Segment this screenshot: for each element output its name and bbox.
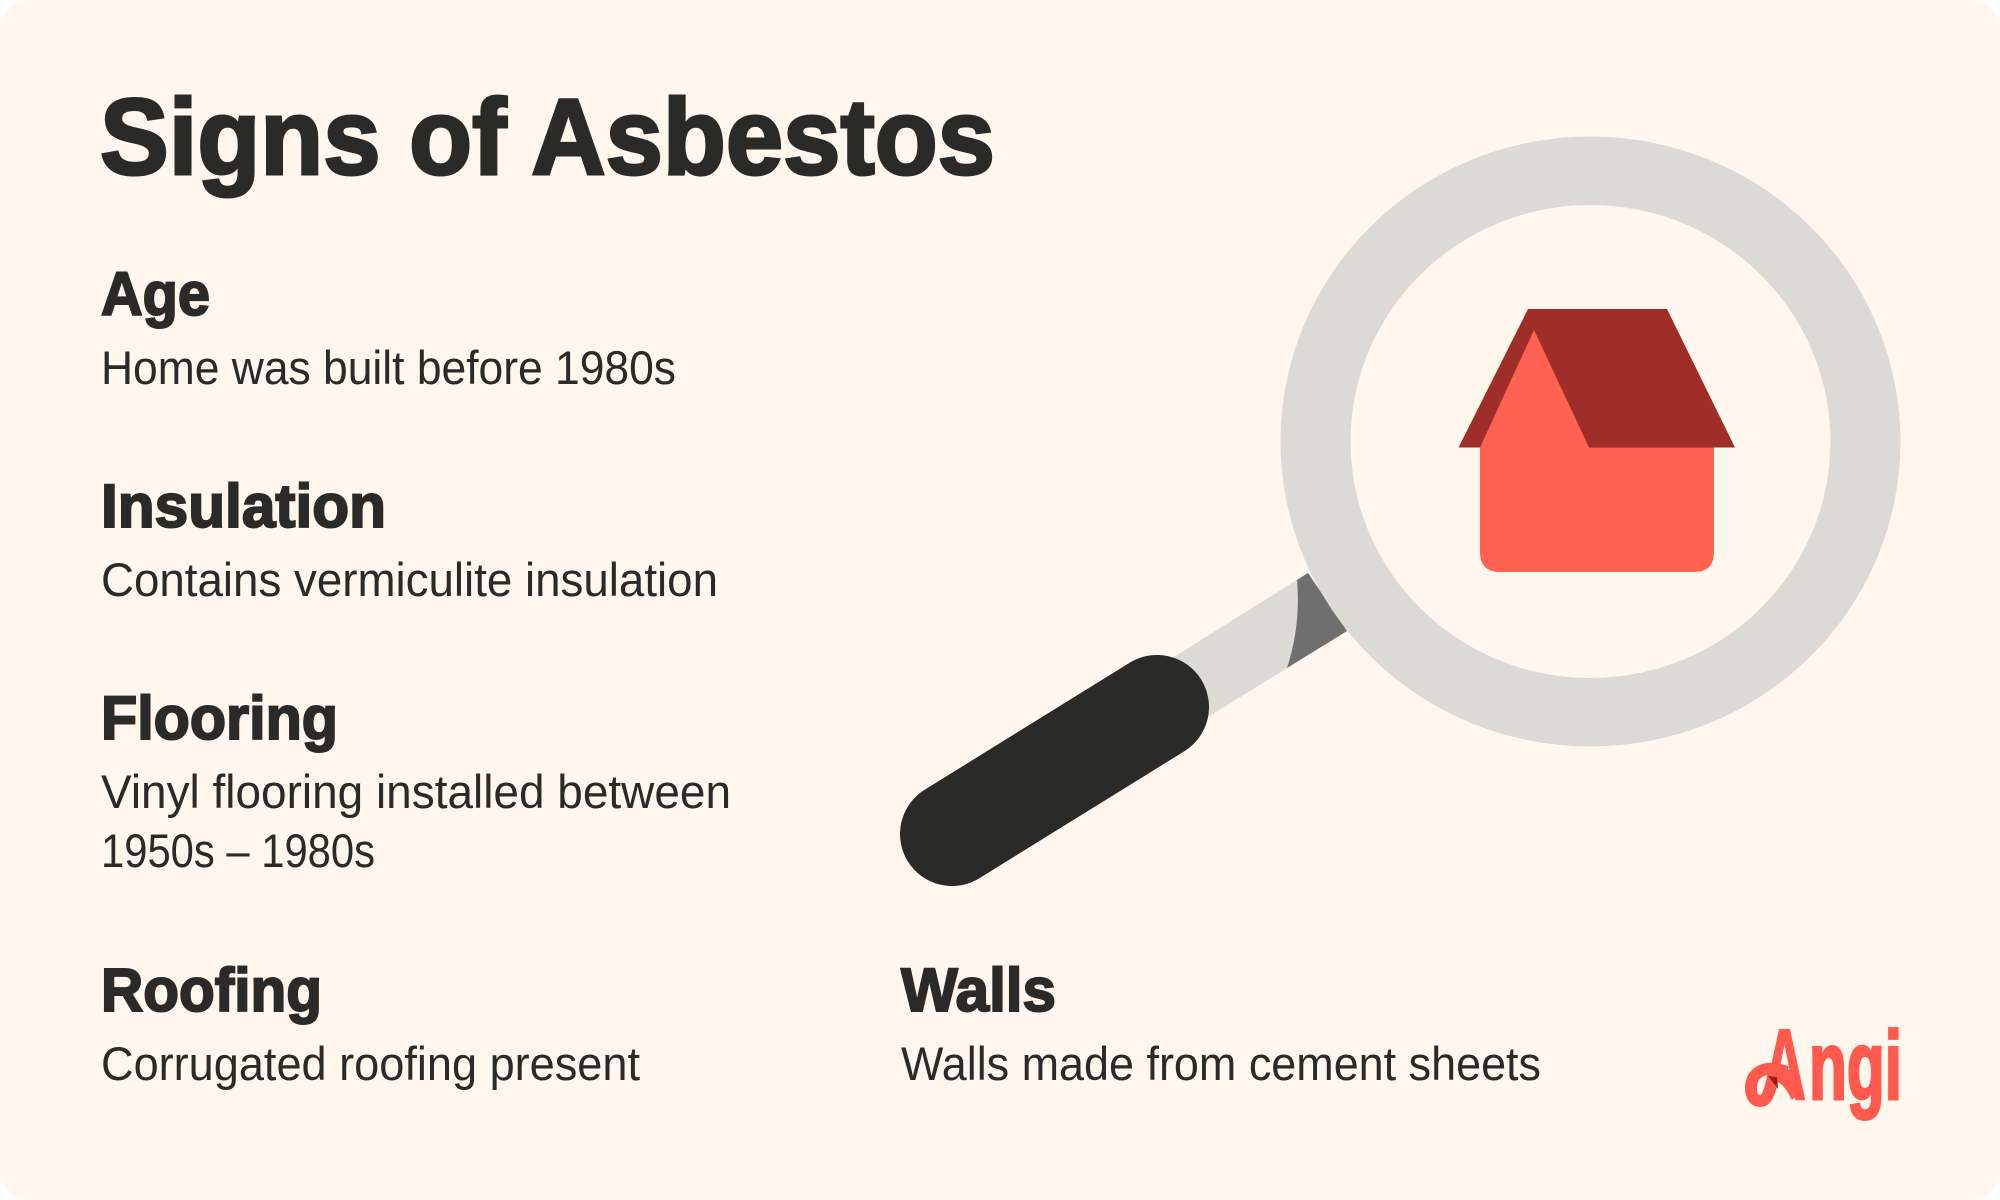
heading: roofing: Roofing — [101, 956, 322, 1024]
description: walls: Walls made from cement sheets — [901, 1037, 1541, 1090]
description: insulation: Contains vermiculite insulation — [101, 553, 718, 606]
sign: insulation — [101, 472, 718, 606]
heading: insulation: Insulation — [101, 472, 386, 540]
sign: roofing — [101, 956, 640, 1090]
description: flooring: 1950s – 1980s — [101, 824, 375, 877]
logo wordmark: A — [1763, 1009, 1806, 1121]
heading: flooring: Flooring — [101, 684, 338, 752]
sign: walls — [901, 956, 1541, 1090]
description: flooring: Vinyl flooring installed between — [101, 765, 731, 818]
heading: age: Age — [101, 260, 210, 328]
description: flooring — [101, 765, 731, 877]
logo wordmark: ngi — [1809, 1011, 1902, 1120]
logo loop shadow — [1768, 1076, 1778, 1089]
description: age: Home was built before 1980s — [101, 341, 676, 394]
logo loop — [1751, 1069, 1797, 1101]
roof — [1458, 309, 1735, 448]
sign: flooring — [101, 684, 731, 877]
heading: walls: Walls — [901, 956, 1056, 1024]
house body — [1480, 330, 1714, 572]
magnifier shaft — [1150, 573, 1347, 728]
magnifier handle — [952, 707, 1157, 834]
sign: age — [101, 260, 676, 394]
logo: Angi — [1745, 1027, 1899, 1121]
title: Signs of Asbestos — [100, 76, 995, 197]
icon: magnifying glass — [952, 136, 1900, 834]
magnifier ring — [1280, 136, 1900, 746]
description: roofing: Corrugated roofing present — [101, 1037, 640, 1090]
logo wordmark — [1772, 1027, 1899, 1121]
icon: house — [1458, 309, 1735, 572]
shaft shadow — [1287, 573, 1347, 668]
